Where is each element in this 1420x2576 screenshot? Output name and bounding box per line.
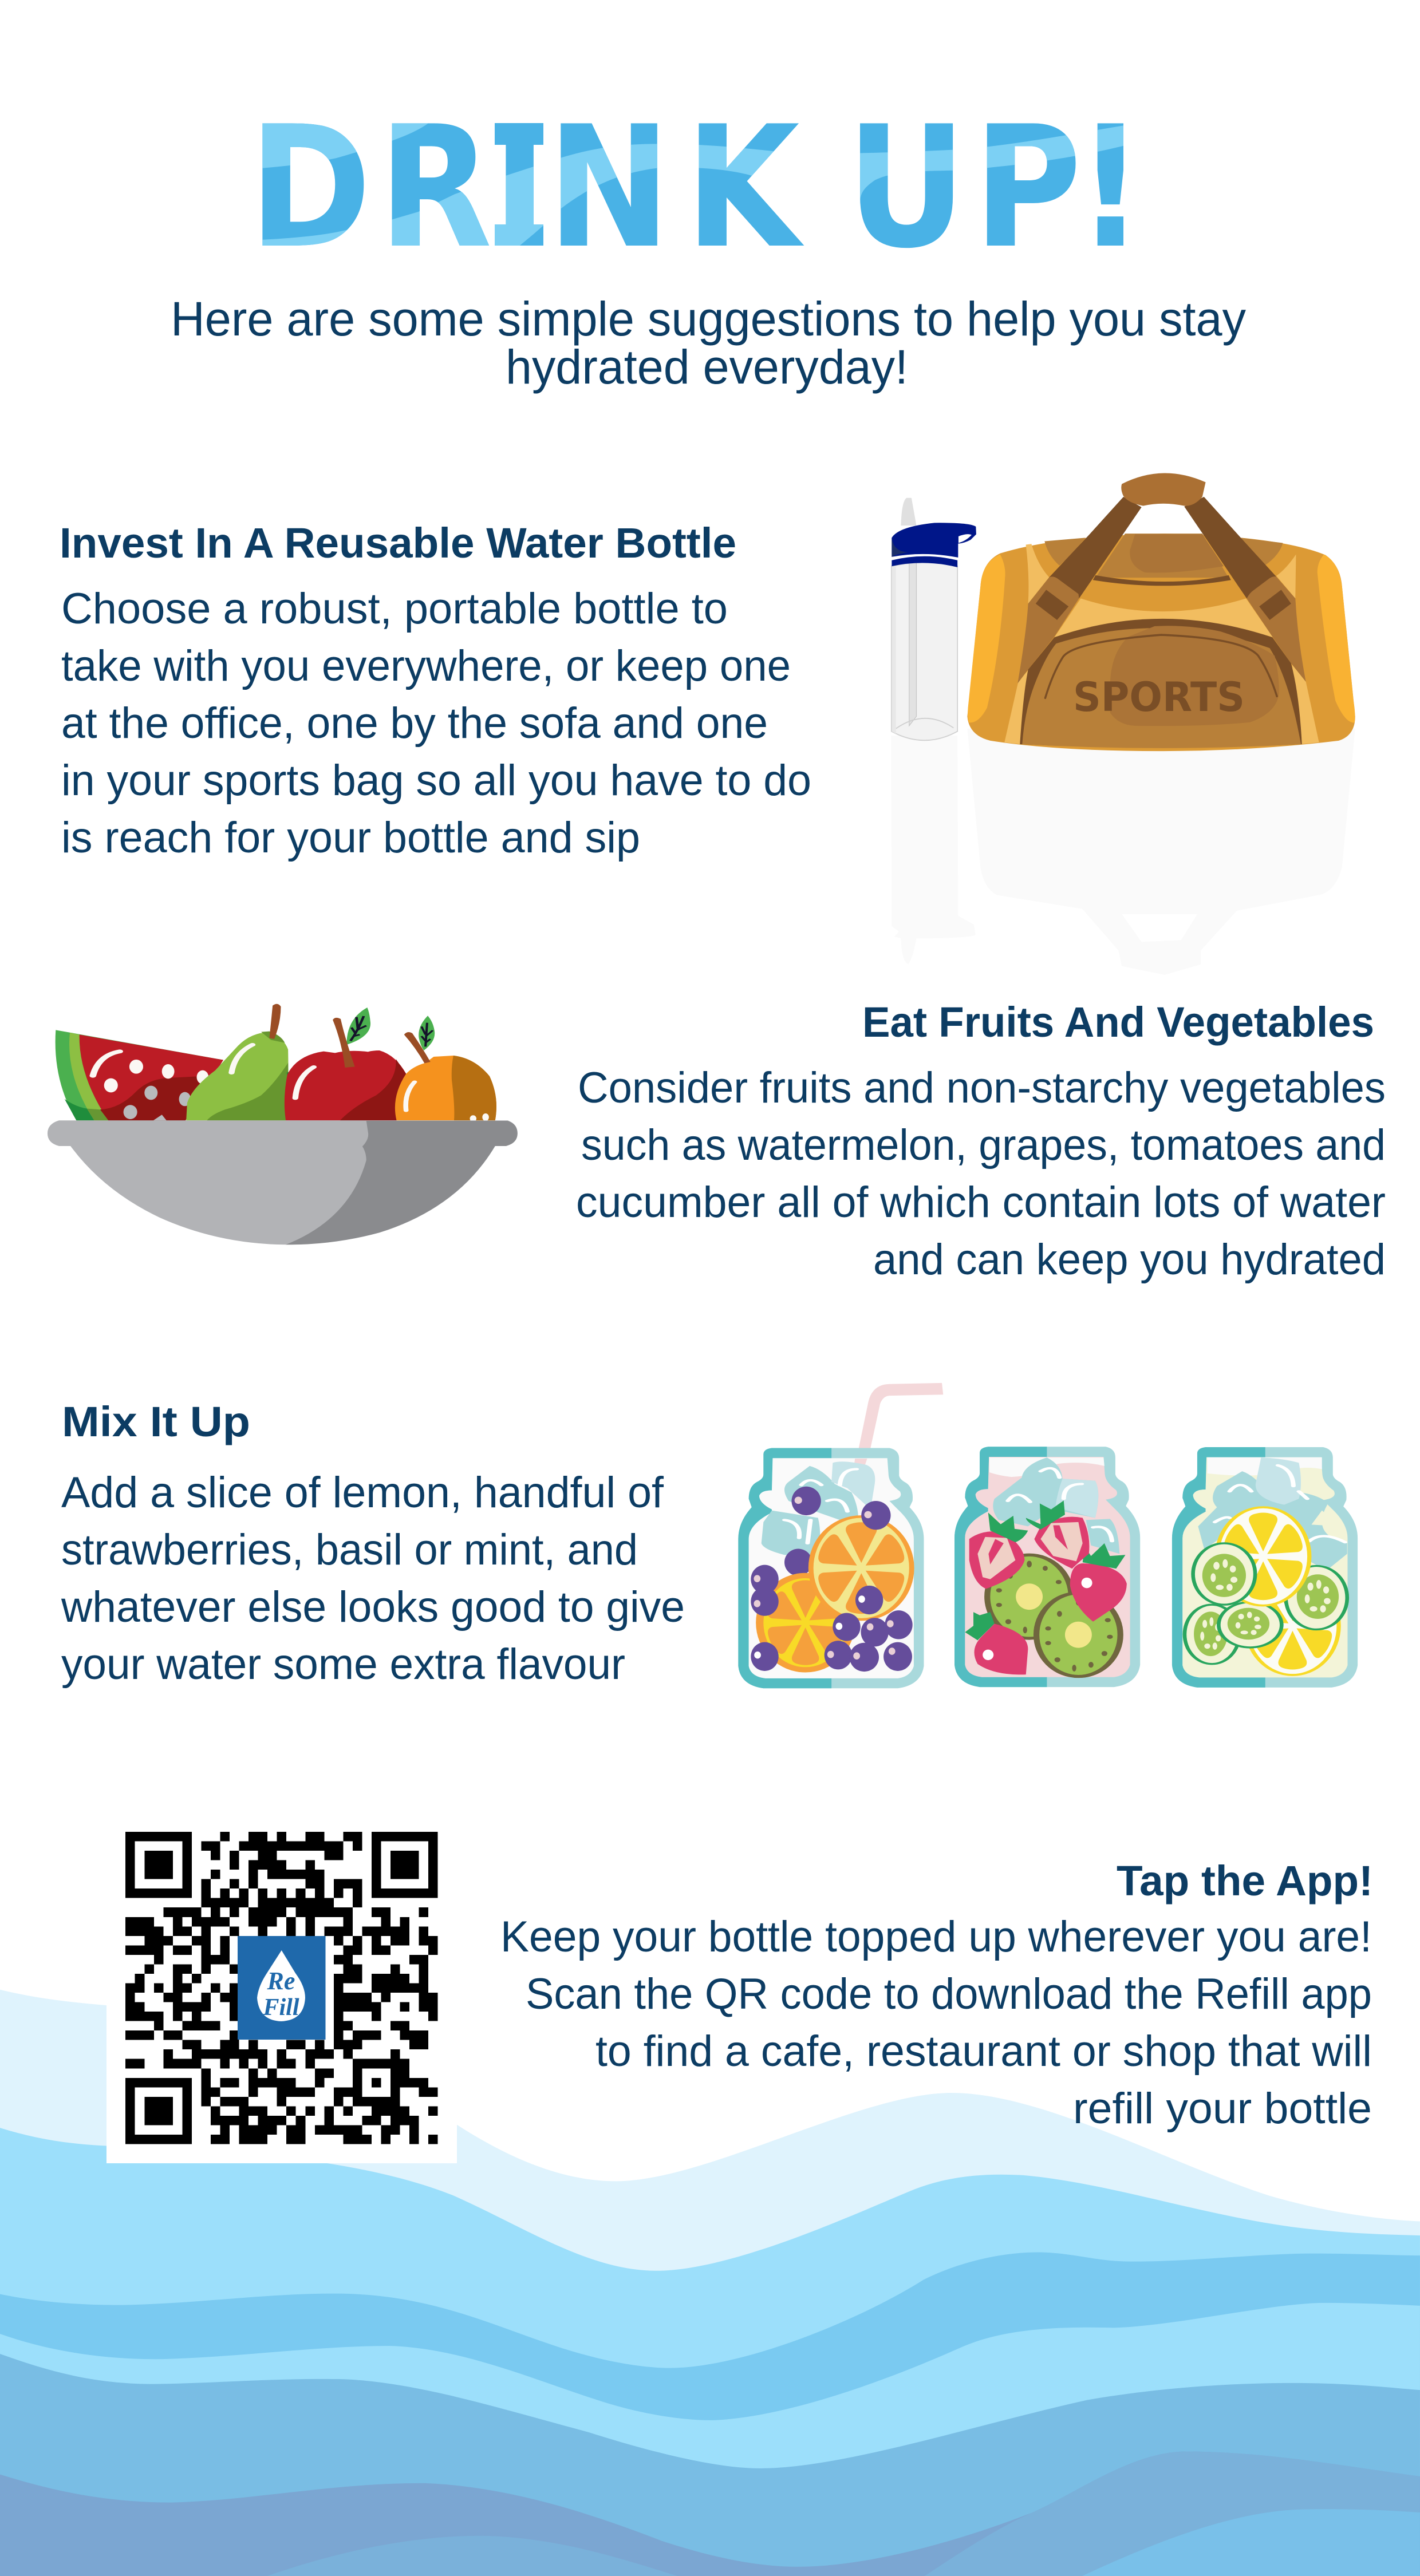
text block: mix it up: your water some extra flavour	[61, 1640, 625, 1689]
text block: eat fruits and vegetables: Consider fruits and non-starchy vegetables	[578, 1064, 1386, 1112]
bowl	[48, 1120, 518, 1244]
title	[262, 123, 1123, 248]
text block: tap the app	[500, 1857, 1373, 2133]
text block: invest in a reusable water bottle: at the office, one by the sofa and one	[61, 699, 768, 748]
text block: invest in a reusable water bottle: Choose a robust, portable bottle to	[61, 584, 728, 633]
text block: mix it up	[61, 1398, 685, 1689]
text block: tap the app: to find a cafe, restaurant or shop that will	[595, 2027, 1372, 2076]
icon: Refill logo	[238, 1936, 325, 2040]
text block: mix it up: strawberries, basil or mint, and	[61, 1526, 638, 1574]
QR modules	[125, 1832, 438, 2144]
subtitle	[171, 292, 1246, 394]
panel: QR code	[107, 1815, 457, 2163]
text block: eat fruits and vegetables: cucumber all of which contain lots of water	[576, 1178, 1386, 1227]
text block: eat fruits and vegetables: Eat Fruits And Vegetables	[862, 998, 1374, 1046]
subtitle: hydrated everyday!	[506, 340, 908, 394]
icon: Refill logo: Fill	[262, 1994, 299, 2021]
text block: mix it up: Mix It Up	[62, 1398, 250, 1445]
jar 1: orange and blueberry	[738, 1383, 943, 1688]
text block: mix it up: Add a slice of lemon, handful of	[61, 1468, 664, 1517]
text block: invest in a reusable water bottle: in your sports bag so all you have to do	[61, 756, 811, 805]
text block: tap the app: Keep your bottle topped up wherever you are!	[500, 1913, 1372, 1961]
icon: Refill logo: Re	[267, 1967, 295, 1995]
jar 2: strawberry and kiwi	[954, 1447, 1140, 1687]
bag label: SPORTS	[1073, 674, 1245, 721]
text block: tap the app: refill your bottle	[1073, 2084, 1372, 2133]
text block: eat fruits and vegetables: and can keep you hydrated	[873, 1235, 1386, 1284]
text block: invest in a reusable water bottle: is reach for your bottle and sip	[61, 813, 640, 862]
text block: invest in a reusable water bottle: Invest In A Reusable Water Bottle	[60, 519, 736, 567]
text block: tap the app: Scan the QR code to download the Refill app	[526, 1970, 1372, 2018]
text block: invest in a reusable water bottle	[60, 519, 811, 862]
illustration: fruit bowl	[48, 1004, 518, 1244]
subtitle: Here are some simple suggestions to help you stay	[171, 292, 1246, 346]
apple	[285, 1008, 407, 1120]
illustration: sports bag with reflection	[967, 473, 1355, 975]
background waves	[0, 1990, 1420, 2576]
pear	[186, 1004, 289, 1120]
text block: mix it up: whatever else looks good to give	[61, 1583, 685, 1631]
jar 3: lemon and cucumber	[1172, 1447, 1358, 1688]
title: DRINK UP!	[249, 90, 1144, 286]
watermelon	[56, 1030, 223, 1120]
text block: invest in a reusable water bottle: take with you everywhere, or keep one	[61, 642, 791, 690]
text block: tap the app: Tap the App!	[1117, 1857, 1373, 1905]
illustration: water bottle with reflection	[891, 498, 976, 965]
text block: eat fruits and vegetables: such as watermelon, grapes, tomatoes and	[581, 1121, 1386, 1170]
orange	[395, 1016, 496, 1122]
text block: eat fruits and vegetables	[576, 998, 1386, 1284]
illustration: infused water jars	[738, 1383, 1358, 1688]
